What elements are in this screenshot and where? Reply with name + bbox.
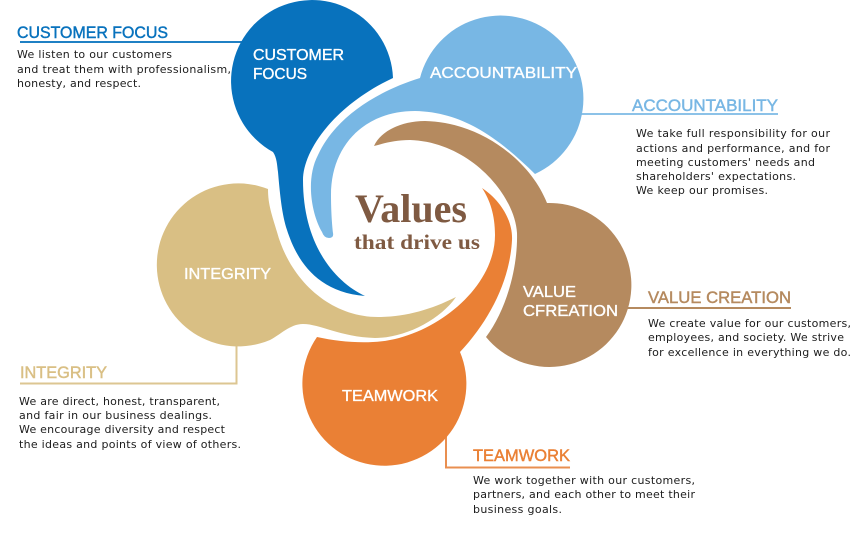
title: values that drive us: [354, 186, 480, 254]
label: customer focus: CUSTOMER: [253, 47, 344, 64]
text: teamwork body: partners, and each other to meet their: [473, 488, 695, 501]
heading: teamwork: TEAMWORK: [473, 446, 571, 465]
text: accountability body: We keep our promises.: [636, 184, 768, 197]
petal: customer focus: [231, 0, 393, 296]
text: value creation body: [648, 317, 851, 359]
text: teamwork body: We work together with our customers,: [473, 474, 695, 487]
text: accountability body: shareholders' expectations.: [636, 170, 796, 183]
text: value creation body: employees, and society. We strive: [648, 331, 844, 344]
text: accountability body: We take full responsibility for our: [636, 127, 830, 140]
title: values that drive us: Values: [355, 186, 467, 231]
text: customer focus body: We listen to our customers: [17, 48, 172, 61]
label: integrity: INTEGRITY: [184, 266, 271, 283]
text: integrity body: We encourage diversity and respect: [19, 423, 226, 436]
heading: accountability: ACCOUNTABILITY: [632, 96, 778, 115]
label: value creation: CFREATION: [523, 303, 618, 320]
panel: value creation description: [626, 288, 851, 359]
text: integrity body: and fair in our business dealings.: [19, 409, 212, 422]
text: customer focus body: [17, 48, 231, 90]
text: teamwork body: business goals.: [473, 503, 562, 516]
label: customer focus: [253, 47, 344, 83]
text: accountability body: meeting customers' needs and: [636, 156, 815, 169]
title: values that drive us: that drive us: [354, 230, 480, 254]
petal: teamwork: [302, 188, 512, 466]
panel: accountability description: [580, 96, 830, 197]
text: integrity body: the ideas and points of view of others.: [19, 438, 241, 451]
label: customer focus: FOCUS: [253, 66, 307, 83]
text: teamwork body: [473, 474, 695, 516]
heading: customer focus: CUSTOMER FOCUS: [17, 23, 168, 42]
text: value creation body: We create value for our customers,: [648, 317, 851, 330]
text: accountability body: actions and performance, and for: [636, 142, 830, 155]
heading: integrity: INTEGRITY: [20, 363, 107, 382]
text: value creation body: for excellence in everything we do.: [648, 346, 851, 359]
heading: value creation: VALUE CREATION: [648, 288, 791, 307]
label: teamwork: TEAMWORK: [342, 388, 438, 405]
label: accountability: ACCOUNTABILITY: [430, 65, 577, 82]
panel: teamwork description: [446, 436, 695, 516]
text: accountability body: [636, 127, 830, 197]
panel: integrity description: [19, 345, 241, 451]
label: value creation: VALUE: [523, 284, 576, 301]
petal: accountability: [311, 16, 583, 238]
text: integrity body: We are direct, honest, transparent,: [19, 395, 220, 408]
text: customer focus body: and treat them with professionalism,: [17, 63, 231, 76]
text: integrity body: [19, 395, 241, 451]
panel: customer focus description: [17, 23, 245, 90]
petal: value creation: [374, 121, 631, 367]
petal: integrity: [157, 183, 456, 346]
text: customer focus body: honesty, and respect.: [17, 77, 141, 90]
label: value creation: [523, 284, 618, 320]
